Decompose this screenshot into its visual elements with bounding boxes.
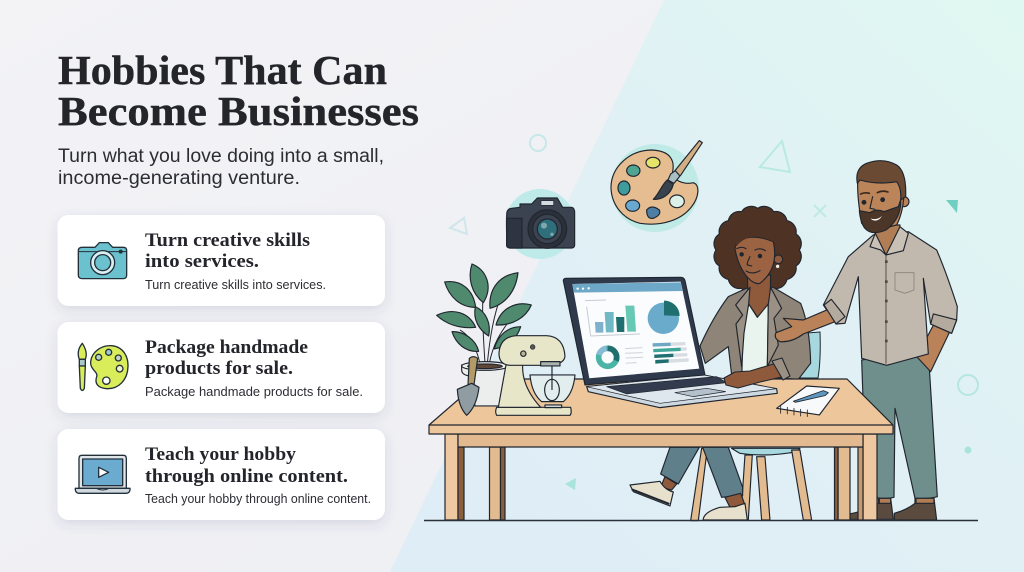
top (742, 304, 768, 372)
card heading (145, 444, 348, 487)
face (774, 255, 783, 264)
woman's forearm and hand on keyboard (724, 358, 790, 388)
potted plant (437, 264, 531, 415)
neck (747, 275, 771, 318)
subtitle: Turn what you love doing into a small, (58, 146, 384, 167)
card heading: Turn creative skills (145, 230, 310, 251)
hair (857, 161, 906, 200)
card text: Turn creative skills into services. (145, 278, 326, 292)
lapels (736, 287, 750, 367)
shirt (823, 232, 957, 365)
chair back (795, 332, 820, 378)
title: Hobbies That Can (58, 47, 387, 93)
subtitle (58, 146, 384, 189)
right forearm (917, 324, 949, 372)
card heading: products for sale. (145, 358, 293, 379)
seated legs, shoes and chair (630, 447, 812, 521)
trousers (862, 352, 937, 499)
card text: Package handmade products for sale. (145, 385, 363, 399)
shoes (849, 498, 937, 520)
card heading: Teach your hobby (145, 444, 297, 465)
panel: handmade products card (58, 322, 385, 413)
card heading (145, 230, 310, 272)
card text: Teach your hobby through online content. (145, 492, 371, 506)
card heading: through online content. (145, 466, 348, 487)
laptop with dashboard (563, 277, 777, 408)
card heading: into services. (145, 251, 259, 272)
panel: online content card (58, 429, 385, 520)
hair (714, 206, 801, 294)
man standing figure (823, 161, 957, 520)
blazer (700, 287, 811, 379)
icon: camera (78, 243, 127, 279)
floor line (424, 520, 978, 522)
neck (875, 225, 900, 255)
panel: creative skills card (58, 215, 385, 306)
decorative shapes (450, 135, 978, 490)
title (58, 47, 419, 134)
woman seated figure (700, 206, 811, 379)
subtitle: income-generating venture. (58, 168, 300, 189)
card heading: Package handmade (145, 337, 308, 358)
title: Become Businesses (58, 88, 419, 134)
head (899, 197, 909, 207)
man's forearm, hand and cuff (775, 299, 845, 342)
trowel (468, 357, 478, 385)
back legs (490, 447, 850, 520)
pot (462, 365, 508, 406)
stand mixer (496, 336, 575, 415)
icon: large camera (505, 189, 575, 259)
apron (458, 434, 863, 447)
icon: palette and brush (78, 343, 128, 390)
card heading (145, 337, 308, 379)
beard (859, 200, 901, 233)
notepad and pen (777, 386, 839, 417)
collar (870, 227, 908, 255)
tabletop (429, 379, 893, 434)
front legs (445, 434, 877, 520)
icon: laptop with play button (75, 455, 130, 493)
icon: artist palette (611, 141, 702, 232)
desk (429, 379, 893, 520)
